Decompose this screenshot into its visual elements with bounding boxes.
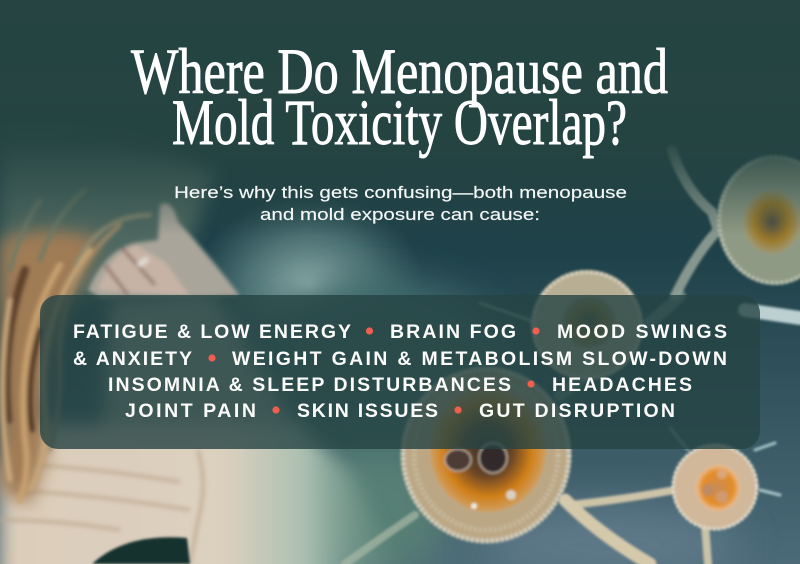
subtitle bbox=[174, 183, 627, 224]
symptom line 2: WEIGHT GAIN & METABOLISM SLOW-DOWN bbox=[232, 348, 727, 370]
hair strands bbox=[2, 190, 150, 500]
symptom line 3 bbox=[108, 374, 692, 396]
subtitle: and mold exposure can cause: bbox=[260, 205, 540, 224]
symptom line 1: FATIGUE & LOW ENERGY bbox=[73, 321, 351, 343]
symptom line 2: & ANXIETY bbox=[73, 348, 192, 370]
upper hair shade bbox=[0, 130, 215, 300]
dark gap bbox=[92, 537, 190, 564]
panel background bbox=[40, 295, 760, 449]
hand bbox=[88, 203, 240, 298]
sweater bbox=[0, 425, 410, 564]
panel: symptoms bbox=[40, 295, 760, 449]
photo: mold cells and hyphae bbox=[345, 150, 800, 564]
symptom line 1: MOOD SWINGS bbox=[557, 321, 727, 343]
symptom line 4: GUT DISRUPTION bbox=[479, 400, 675, 422]
subtitle: Here’s why this gets confusing—both menopause bbox=[174, 183, 627, 202]
symptom line 4: SKIN ISSUES bbox=[297, 400, 438, 422]
title bbox=[131, 36, 668, 159]
photo: woman with hand on head bbox=[0, 130, 410, 564]
cell: top right bbox=[717, 155, 800, 285]
symptom line 3: HEADACHES bbox=[552, 374, 692, 396]
sweater folds bbox=[0, 450, 203, 564]
symptom line 4 bbox=[125, 400, 675, 422]
title: Mold Toxicity Overlap? bbox=[172, 87, 627, 159]
symptom line 4: JOINT PAIN bbox=[125, 400, 256, 422]
photo: teal glow bbox=[195, 195, 740, 564]
symptom line 3: INSOMNIA & SLEEP DISTURBANCES bbox=[108, 374, 511, 396]
top dark overlay bbox=[0, 0, 800, 235]
hyphae branches bbox=[345, 150, 800, 564]
cell: center bbox=[531, 270, 643, 380]
symptom line 1 bbox=[73, 321, 727, 343]
cell: lower right bbox=[672, 444, 758, 530]
hair mass bbox=[0, 230, 100, 505]
symptom line 1: BRAIN FOG bbox=[390, 321, 516, 343]
cell: large bbox=[401, 367, 571, 543]
arm behind panel bbox=[100, 290, 300, 470]
